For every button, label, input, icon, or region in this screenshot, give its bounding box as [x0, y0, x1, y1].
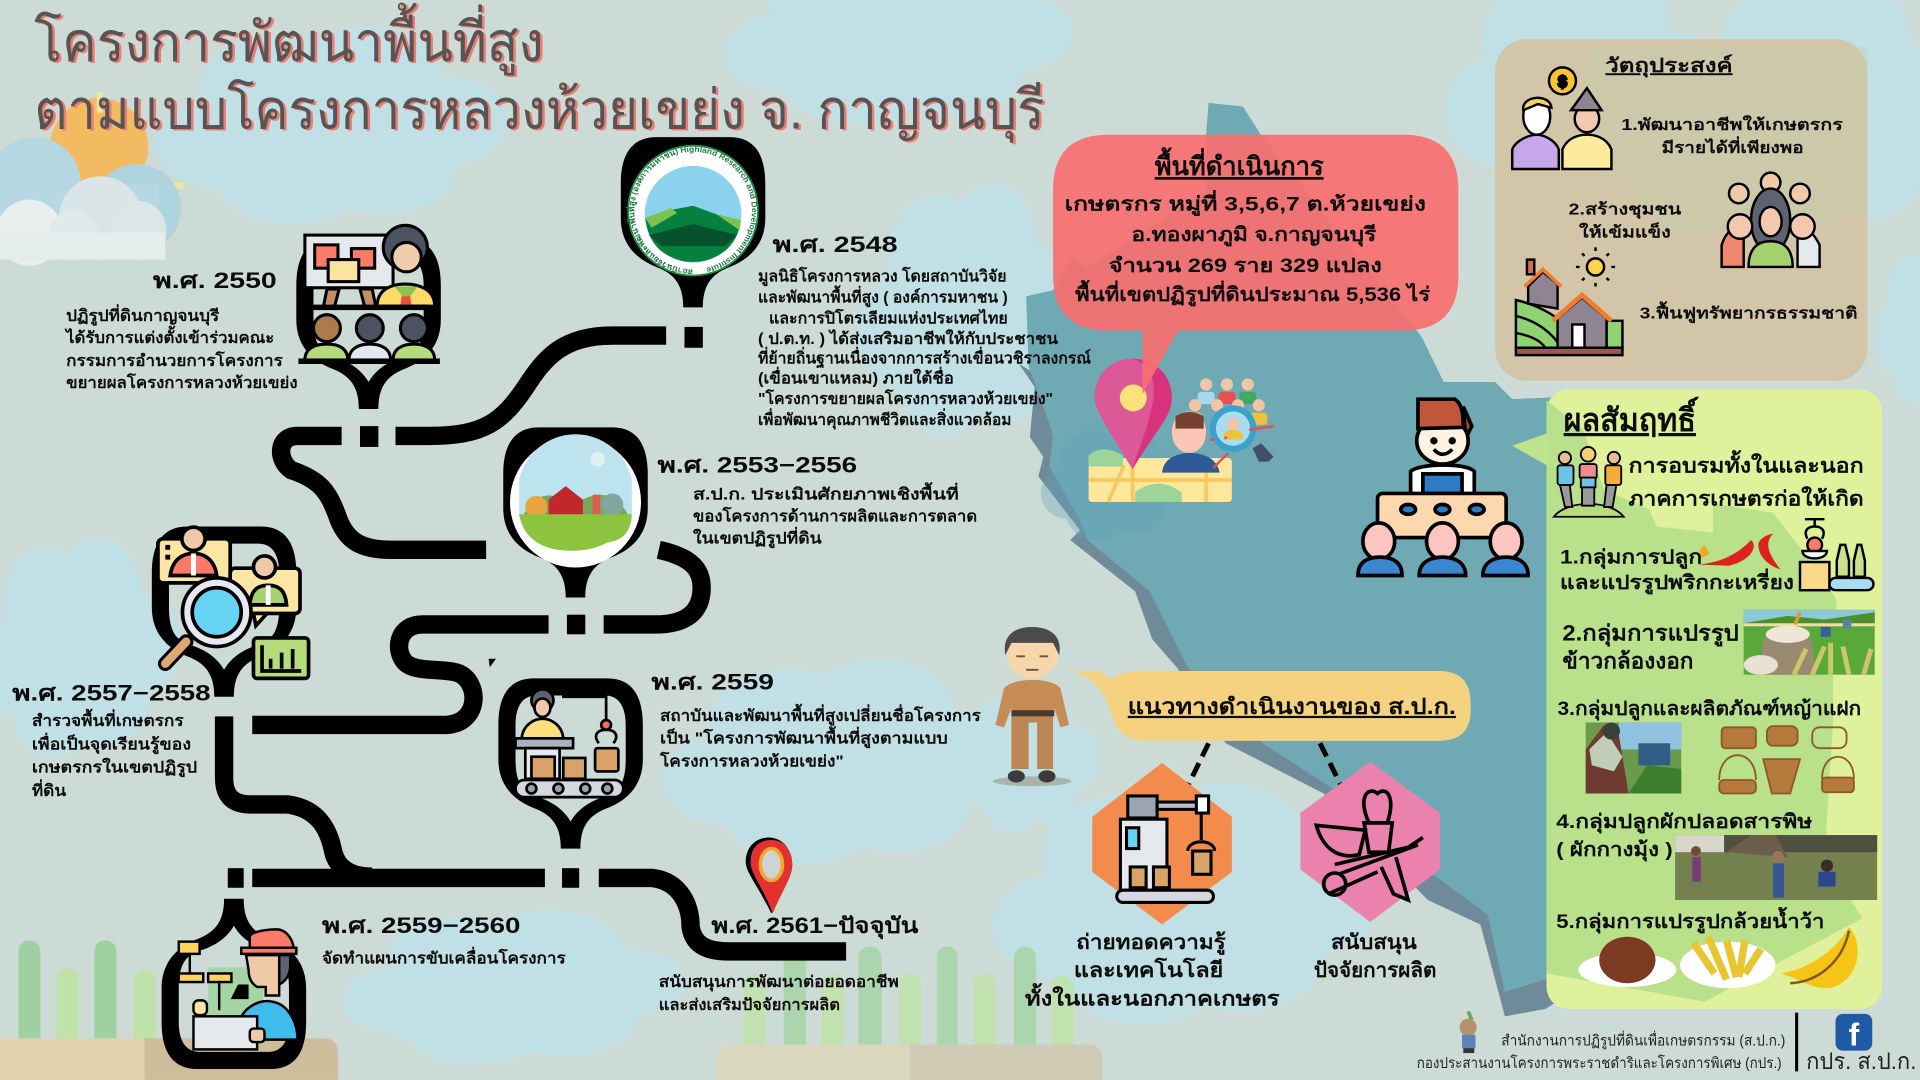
panel: outcomes: 1.กลุ่มการปลูก — [1560, 546, 1702, 570]
location pin red — [746, 838, 792, 913]
milestone 2559 text — [651, 669, 981, 771]
title: ตามแบบโครงการหลวงห้วยเขย่ง จ. กาญจนบุรี — [34, 79, 1044, 144]
milestone 2548 text: มูลนิธิโครงการหลวง โดยสถาบันวิจัย — [758, 266, 1007, 288]
caption: knowledge transfer: และเทคโนโลยี — [1074, 957, 1223, 982]
milestone 2550 text: ปฏิรูปที่ดินกาญจนบุรี — [66, 304, 220, 327]
panel: objectives: ให้เข้มแข็ง — [1579, 221, 1671, 242]
milestone 2561 text — [659, 913, 918, 1014]
milestone 2557-2558 text: เพื่อเป็นจุดเรียนรู้ของ — [32, 732, 191, 755]
callout: operating area — [1053, 135, 1458, 394]
footer: สำนักงานการปฏิรูปที่ดินเพื่อเกษตรกรรม (ส.ป.ก.) — [1501, 1031, 1785, 1050]
callout: operating area: พื้นที่เขตปฏิรูปที่ดินประมาณ 5,536 ไร่ — [1075, 279, 1431, 308]
panel: outcomes: ข้าวกล้องงอก — [1562, 649, 1693, 674]
callout: operating area: เกษตรกร หมู่ที่ 3,5,6,7 ต.ห้วยเขย่ง — [1065, 190, 1426, 218]
icon: chillies and bottles — [1697, 519, 1873, 590]
milestone 2559 text: เป็น "โครงการพัฒนาพื้นที่สูงตามแบบ — [660, 725, 948, 749]
icon: farmers: $ — [1558, 74, 1567, 91]
milestone 2550 text: พ.ศ. 2550 — [153, 268, 277, 293]
panel: outcomes — [1512, 389, 1882, 1009]
pin 2550 with meeting icon — [296, 225, 441, 409]
pin 2557 with magnifier icon — [152, 527, 309, 697]
caption: production support — [1314, 931, 1436, 982]
milestone 2553-2556 text: ส.ป.ก. ประเมินศักยภาพเชิงพื้นที่ — [693, 482, 959, 504]
panel: objectives: มีรายได้ที่เพียงพอ — [1662, 136, 1804, 157]
milestone 2548 text: "โครงการขยายผลโครงการหลวงห้วยเขย่ง" — [758, 388, 1053, 408]
milestone 2548 text: และการปิโตรเลียมแห่งประเทศไทย — [769, 307, 1008, 327]
panel: outcomes: 2.กลุ่มการแปรรูป — [1562, 620, 1739, 647]
milestone 2548 text: เพื่อพัฒนาคุณภาพชีวิตและสิ่งแวดล้อม — [758, 408, 1011, 430]
pin 2553 with farm scene — [503, 427, 648, 598]
panel: objectives: 2.สร้างชุมชน — [1569, 200, 1681, 219]
icon: facebook: f — [1849, 1017, 1860, 1053]
title — [34, 3, 1047, 145]
caption: production support: สนับสนุน — [1331, 931, 1418, 955]
icon: presenter at table — [1358, 399, 1528, 576]
milestone 2557-2558 text: สำรวจพื้นที่เกษตรกร — [32, 708, 184, 730]
callout: guidelines — [1075, 671, 1471, 741]
figure: officer — [993, 627, 1071, 786]
image: vetiver farmers — [1586, 722, 1681, 793]
icon: community — [1722, 173, 1820, 267]
icon: map pin and people — [1089, 359, 1273, 502]
pin 2548 with logo: สถาบันวิจัยและพัฒนาพื้นที่สูง (องค์การมหาชน) Highland Research and Development Institute — [626, 146, 757, 274]
panel: outcomes: 4.กลุ่มปลูกผักปลอดสารพิษ — [1556, 811, 1812, 835]
map: shadow — [1019, 364, 1592, 1016]
milestone 2559-2560 text: พ.ศ. 2559−2560 — [322, 913, 520, 938]
title: โครงการพัฒนาพื้นที่สูง — [34, 3, 544, 76]
panel: outcomes: ( ผักกางมุ้ง ) — [1556, 839, 1673, 862]
panel: objectives — [1495, 39, 1867, 381]
bottom-left fence — [0, 940, 338, 1080]
milestone 2559 text: พ.ศ. 2559 — [651, 669, 774, 694]
connector lines — [1188, 743, 1341, 786]
milestone 2559 text: สถาบันและพัฒนาพื้นที่สูงเปลี่ยนชื่อโครงการ — [660, 703, 981, 727]
pin 2559-2560 with worker icon — [162, 899, 306, 1069]
milestone 2553-2556 text — [658, 453, 977, 550]
panel: outcomes: 5.กลุ่มการแปรรูปกล้วยน้ำว้า — [1556, 906, 1824, 935]
timeline road — [224, 336, 846, 951]
caption: knowledge transfer: ถ่ายทอดความรู้ — [1076, 930, 1227, 956]
title: โครงการพัฒนาพื้นที่สูง — [37, 4, 546, 77]
milestone 2561 text: และส่งเสริมปัจจัยการผลิต — [659, 996, 840, 1014]
milestone 2548 text — [758, 232, 1091, 430]
panel: outcomes: การอบรมทั้งในและนอก — [1629, 450, 1864, 478]
milestone 2553-2556 text: ของโครงการด้านการผลิตและการตลาด — [693, 506, 977, 526]
milestone 2559-2560 text: จัดทำแผนการขับเคลื่อนโครงการ — [322, 947, 566, 968]
callout: operating area: พื้นที่ดำเนินการ — [1155, 147, 1324, 181]
hexagon: production support — [1300, 762, 1440, 922]
milestone 2557-2558 text — [12, 680, 211, 800]
footer: กองประสานงานโครงการพระราชดำริและโครงการพิเศษ (กปร.) — [1417, 1054, 1782, 1072]
icon: training group — [1554, 447, 1624, 517]
milestone 2550 text: ขยายผลโครงการหลวงห้วยเขย่ง — [66, 372, 298, 392]
milestone 2561 text: สนับสนุนการพัฒนาต่อยอดอาชีพ — [659, 972, 899, 992]
map — [1026, 103, 1592, 992]
icon: farmers — [1512, 67, 1611, 169]
milestone 2548 text: (เขื่อนเขาแหลม) ภายใต้ชื่อ — [758, 366, 954, 387]
icon: mascot — [1460, 1011, 1477, 1053]
title: ตามแบบโครงการหลวงห้วยเขย่ง จ. กาญจนบุรี — [37, 80, 1047, 145]
cloud tint over map — [1041, 425, 1186, 541]
callout: operating area: อ.ทองผาภูมิ จ.กาญจนบุรี — [1131, 223, 1377, 248]
caption: knowledge transfer — [1025, 930, 1281, 1010]
milestone 2548 text: ที่ย้ายถิ่นฐานเนื่องจากการสร้างเขื่อนวชิราลงกรณ์ — [758, 347, 1091, 369]
image: vegetable garden — [1675, 835, 1877, 900]
milestone 2557-2558 text: ที่ดิน — [32, 779, 66, 800]
milestone 2548 text: และพัฒนาพื้นที่สูง ( องค์การมหาชน ) — [758, 284, 1008, 308]
callout: operating area: จำนวน 269 ราย 329 แปลง — [1109, 255, 1382, 277]
milestone 2557-2558 text: พ.ศ. 2557−2558 — [12, 680, 211, 705]
caption: knowledge transfer: ทั้งในและนอกภาคเกษตร — [1025, 982, 1281, 1010]
footer — [1417, 1011, 1916, 1074]
panel: outcomes: 3.กลุ่มปลูกและผลิตภัณฑ์หญ้าแฝก — [1558, 697, 1861, 722]
icon: sun — [1576, 247, 1615, 287]
milestone 2561 text: พ.ศ. 2561−ปัจจุบัน — [711, 913, 918, 940]
panel: objectives: 3.ฟื้นฟูทรัพยากรธรรมชาติ — [1640, 300, 1858, 324]
milestone 2559-2560 text — [322, 913, 566, 968]
panel: outcomes: ภาคการเกษตรก่อให้เกิด — [1629, 486, 1864, 511]
milestone 2550 text: กรรมการอำนวยการโครงการ — [66, 350, 283, 370]
milestone 2553-2556 text: พ.ศ. 2553−2556 — [658, 453, 857, 478]
image: banana products — [1578, 927, 1858, 988]
panel: outcomes: ผลสัมฤทธิ์ — [1564, 396, 1700, 438]
icon: farm houses — [1516, 260, 1622, 355]
caption: production support: ปัจจัยการผลิต — [1314, 959, 1436, 982]
road stop marks — [228, 327, 703, 888]
panel: outcomes: และแปรรูปพริกกะเหรี่ยง — [1560, 568, 1794, 596]
milestone 2548 text: พ.ศ. 2548 — [773, 232, 898, 257]
cloud at sun — [0, 137, 181, 266]
sun — [50, 92, 184, 196]
milestone 2557-2558 text: เกษตรกรในเขตปฏิรูป — [32, 758, 197, 779]
image: baskets — [1719, 726, 1854, 793]
pin 2559 with factory icon — [498, 678, 643, 849]
milestone 2550 text: ได้รับการแต่งตั้งเข้าร่วมคณะ — [64, 325, 274, 347]
panel: objectives: 1.พัฒนาอาชีพให้เกษตรกร — [1621, 115, 1843, 134]
callout: guidelines: แนวทางดำเนินงานของ ส.ป.ก. — [1128, 694, 1456, 719]
milestone 2548 text: ( ป.ต.ท. ) ได้ส่งเสริมอาชีพให้กับประชาชน — [758, 329, 1058, 348]
milestone 2550 text — [64, 268, 298, 392]
bottom-centre fence — [716, 947, 1102, 1080]
milestone 2559 text: โครงการหลวงห้วยเขย่ง" — [659, 751, 844, 771]
panel: objectives: วัตถุประสงค์ — [1605, 54, 1733, 78]
hexagon: knowledge transfer — [1092, 763, 1232, 924]
footer: กปร. ส.ป.ก. — [1806, 1048, 1916, 1074]
image: rice field — [1744, 610, 1875, 675]
milestone 2553-2556 text: ในเขตปฏิรูปที่ดิน — [693, 527, 822, 550]
icon: facebook — [1836, 1014, 1872, 1053]
